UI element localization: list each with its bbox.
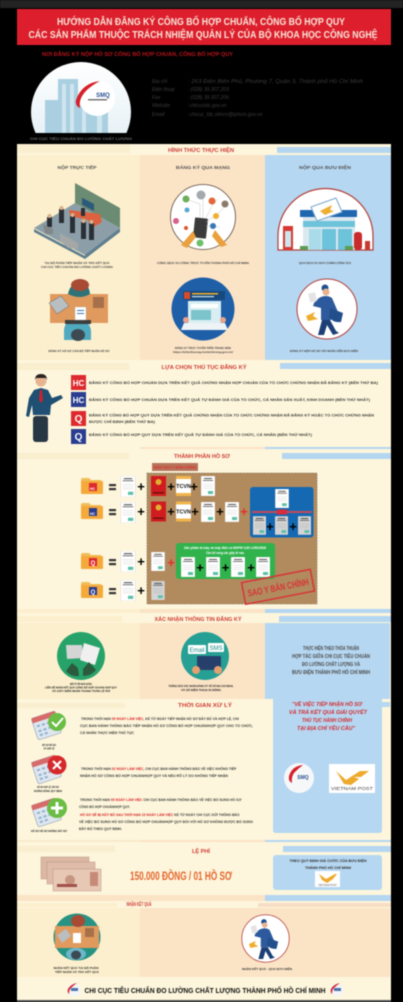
caption xyxy=(54,965,99,974)
icon: email and sms xyxy=(181,632,229,680)
caption: VÀ HỢP LỆ xyxy=(44,746,55,750)
caption: TẠI BỘ PHẬN TIẾP NHẬN VÀ TRẢ KẾT QUẢ xyxy=(44,260,110,265)
title banner xyxy=(17,9,391,45)
logo caption: CHI CỤC TIÊU CHUẨN ĐO LƯỜNG CHẤT LƯỢNG xyxy=(30,136,132,141)
panel backgrounds xyxy=(17,144,391,1002)
option: HC blue xyxy=(71,392,370,407)
text: postal cooperation xyxy=(292,644,370,676)
column headings: NỘP QUA BƯU ĐIỆN xyxy=(299,163,352,170)
icon: receipt paperwork xyxy=(57,632,105,680)
row: HC red: + xyxy=(190,479,198,494)
row: Q red: Q xyxy=(91,561,96,567)
column headings: NỘP TRỰC TIẾP xyxy=(58,163,96,170)
blue box: documents xyxy=(250,487,314,538)
text: supplement: TRONG THỜI HẠN 05 NGÀY LÀM VIỆC CHI CỤC BAN HÀNH THÔNG BÁO VỀ VIỆC BỔ SUNG HỒ SƠ xyxy=(80,797,241,802)
option: Q red: ĐƯỢC CHỈ ĐỊNH (BÊN THỨ BA) xyxy=(89,419,155,424)
callout: postal service panel: "VỀ VIỆC TIẾP NHẬN HỒ SƠ xyxy=(292,700,363,708)
green box: documents: + xyxy=(196,560,204,575)
icon: rejected dossier xyxy=(31,755,67,784)
blue box: documents: + xyxy=(289,519,297,534)
callout: postal fee: VIETNAM POST xyxy=(318,884,337,887)
caption: HỒ SƠ HỢP LỆ, ĐẦY ĐỦ xyxy=(37,784,59,789)
fee amount: 150.000 ĐỒNG / 01 HỒ SƠ xyxy=(130,868,233,883)
text: acceptance xyxy=(80,716,253,735)
row: Q blue xyxy=(81,580,165,601)
icon: receive by post xyxy=(242,915,289,962)
contact details: Email xyxy=(152,112,165,118)
callout: postal service panel: TẠI ĐỊA CHỈ YÊU CẦU" xyxy=(297,724,355,732)
text: postal cooperation: THỰC HIỆN THEO THỎA THUẬN xyxy=(303,644,359,652)
contact details xyxy=(152,78,363,118)
option: Q red: ĐĂNG KÝ CÔNG BỐ HỢP QUY DỰA TRÊN KẾT QUẢ CHỨNG NHẬN CỦA TỔ CHỨC CHỨNG NHẬN ĐÃ ĐĂNG KÝ HOẶC TỔ CHỨC CHỨNG NHẬN xyxy=(89,412,375,418)
green box: documents: Sản phẩm là máy và máy điện có ĐDPW 0,60 LI/50USD8 xyxy=(184,546,266,550)
text: acceptance: TRONG THỜI HẠN 05 NGÀY LÀM VIỆC, KỂ TỪ NGÀY TIẾP NHẬN HỒ SƠ ĐẦY ĐỦ VÀ HỢP LỆ, CHI xyxy=(81,716,239,721)
heading: thành phần hồ sơ: THÀNH PHẦN HỒ SƠ xyxy=(174,453,231,460)
heading: nhận kết quả: NHẬN KẾT QUẢ xyxy=(126,901,152,908)
option: HC blue: ĐĂNG KÝ CÔNG BỐ HỢP CHUẨN DỰA TRÊN KẾT QUẢ TỰ ĐÁNH GIÁ CỦA TỔ CHỨC, CÁ NHÂN SẢN XUẤT, KINH DOANH (BÊN THỨ NHẤT) xyxy=(89,397,370,402)
row: HC blue: + xyxy=(216,504,224,519)
text: supplement: HỒ SƠ SẼ BỊ HỦY BỎ SAU THỜI HẠN 15 NGÀY LÀM VIỆC KỂ TỪ NGÀY CHI CỤC GỬI THÔNG BÁO xyxy=(80,812,240,817)
label: bản sao y bản chính: BẢN SAO Y BẢN CHÍNH xyxy=(154,464,197,470)
option: HC blue: HC xyxy=(73,396,84,405)
title banner: HƯỚNG DẪN ĐĂNG KÝ CÔNG BỐ HỢP CHUẨN, CÔNG BỐ HỢP QUY xyxy=(57,14,345,28)
corkboard xyxy=(147,473,317,604)
caption: TIẾP NHẬN VÀ TRẢ KẾT QUẢ xyxy=(55,969,99,974)
caption: NHẬN KẾT QUẢ - QUA BƯU ĐIỆN xyxy=(242,966,292,971)
caption: THÔNG BÁO XÁC NHẬN ĐĂNG KÝ VỀ SỐ ĐỊA CHỈ EMAIL xyxy=(168,683,234,688)
caption: ĐĂNG KÝ HỒ SƠ CÁN BỘ TIẾP NHẬN HỒ SƠ xyxy=(48,348,110,353)
text: supplement: ĐẦY ĐỦ THEO QUY ĐỊNH. xyxy=(79,826,122,831)
row: HC blue: + xyxy=(191,504,199,519)
row: HC red xyxy=(81,476,215,497)
contact details: Website xyxy=(152,103,170,109)
caption: QUA DỊCH VỤ BƯU CHÍNH CÔNG ÍCH xyxy=(299,260,351,265)
caption: https://chicthuong.tncttchtrung.gov.vn/ xyxy=(173,350,233,354)
row: HC blue: + xyxy=(240,504,248,519)
text: acceptance: CÁ NHÂN THỰC HIỆN THỦ TỤC xyxy=(80,730,135,735)
option: HC red xyxy=(71,375,378,390)
heading: thời gian xử lý: THỜI GIAN XỬ LÝ xyxy=(178,701,233,709)
option: HC red: HC xyxy=(73,379,84,388)
row: HC blue: + xyxy=(167,504,175,519)
icon: receive at counter xyxy=(54,914,100,960)
contact details: Điện thoại xyxy=(152,87,175,93)
heading: lệ phí: LỆ PHÍ xyxy=(192,847,211,855)
illustration: online registration laptop xyxy=(172,278,234,340)
contact details: : (028) 39.307.203 xyxy=(188,87,229,93)
row: Q red xyxy=(81,551,175,572)
stamp: sao y bản chính xyxy=(242,569,314,604)
caption: BIÊN TỜ TIẾP NHẬN HƯỚNG xyxy=(70,681,92,686)
caption: VÀ GIẤY BIÊN NHẬN THANH TOÁN LỆ PHÍ xyxy=(52,688,110,693)
caption: ĐĂNG KÝ TRỰC TUYẾN TRÊN TRANG WEB xyxy=(175,345,231,350)
label: bản sao y bản chính xyxy=(152,463,198,471)
text: rejection: NHẬN HỒ SƠ CÔNG BỐ HỢP CHUẨN/HỢP QUY VÀ NÊU RÕ LÝ DO KHÔNG TIẾP NHẬN xyxy=(80,773,229,778)
row: HC blue xyxy=(81,502,248,523)
contact details: : chicuctdc.gov.vn xyxy=(187,103,227,109)
caption: ĐĂNG KÝ NỘP HỒ SƠ VỚI NHÂN VIÊN BƯU ĐIỆN xyxy=(290,348,358,353)
text: supplement xyxy=(79,797,253,831)
caption: LIÊN HỆ NHẬN KẾT QUẢ CÔNG BỐ HỢP CHUẨN/ HỢP QUY xyxy=(45,684,117,690)
caption: CỔNG DỊCH VỤ CÔNG TRỰC TUYẾN THÀNH PHỐ HỒ CHÍ MINH xyxy=(157,260,249,265)
caption xyxy=(173,345,233,354)
green box: documents: + xyxy=(222,560,230,575)
option: Q blue: Q xyxy=(75,432,83,443)
option: HC red: ĐĂNG KÝ CÔNG BỐ HỢP CHUẨN DỰA TRÊN KẾT QUẢ CHỨNG NHẬN HỢP CHUẨN CỦA TỔ CHỨC CHỨNG NHẬN ĐÃ ĐĂNG KÝ (BÊN THỨ BA) xyxy=(89,380,378,385)
callout: postal fee: THÀNH PHỐ HỒ CHÍ MINH xyxy=(305,865,352,870)
caption xyxy=(168,683,234,692)
blue box: documents: + xyxy=(266,519,274,534)
caption: HỒ SƠ ĐÃ ĐỦ xyxy=(42,742,56,747)
subtitle: NƠI ĐĂNG KÝ NỘP HỒ SƠ CÔNG BỐ HỢP CHUẨN, CÔNG BỐ HỢP QUY xyxy=(42,50,234,58)
row: HC blue: HC xyxy=(90,512,95,516)
callout: postal service panel: VÀ TRẢ KẾT QUẢ GIẢI QUYẾT xyxy=(289,708,368,716)
caption: HỒ SƠ HỒ SƠ KHÔNG ĐẦY ĐỦ xyxy=(31,828,67,833)
text: rejection: TRONG THỜI HẠN 02 NGÀY LÀM VIỆC, CHI CỤC BAN HÀNH THÔNG BÁO VỀ VIỆC KHÔNG TIẾP xyxy=(81,766,237,771)
footer xyxy=(68,983,344,996)
contact details: : chicuc_tdc.skhcn@tphcm.gov.vn xyxy=(187,112,263,118)
option: Q red: Q xyxy=(75,414,83,425)
callout: postal service panel: THỦ TỤC HÀNH CHÍNH xyxy=(302,717,353,724)
row: HC red: + xyxy=(137,479,145,494)
illustration: post office xyxy=(278,189,373,250)
contact details: : 263 Điện Biên Phủ, Phường 7, Quận 3, Thành phố Hồ Chí Minh xyxy=(188,78,363,85)
row: Q blue: + xyxy=(137,583,145,598)
green box: documents: + xyxy=(247,560,255,575)
row: HC red: HC xyxy=(90,487,95,491)
column headings xyxy=(58,163,352,170)
icon: accepted dossier xyxy=(31,711,66,740)
icon: banknotes xyxy=(41,857,101,891)
column headings: ĐĂNG KÝ QUA MẠNG xyxy=(176,164,230,170)
text: supplement: CÔNG BỐ HỢP CHUẨN/HỢP QUY. xyxy=(79,804,130,809)
figure: man in suit xyxy=(26,374,63,442)
stamp: sao y bản chính: SAO Y BẢN CHÍNH xyxy=(247,576,310,600)
heading: hình thức thực hiện: HÌNH THỨC THỰC HIỆN xyxy=(168,146,234,154)
text: postal cooperation: HỢP TÁC GIỮA CHI CỤC TIÊU CHUẨN xyxy=(292,652,370,660)
contact details: : (028) 39.307.206 xyxy=(188,95,229,101)
caption: CHI CỤC TIÊU CHUẨN ĐO LƯỜNG CHẤT LƯỢNG xyxy=(41,264,113,269)
text: rejection xyxy=(80,766,237,778)
row: Q blue: Q xyxy=(91,590,96,596)
footer: CHI CỤC TIÊU CHUẨN ĐO LƯỜNG CHẤT LƯỢNG THÀNH PHỐ HỒ CHÍ MINH xyxy=(84,985,326,995)
logo: Vietnam Post: VIETNAM POST xyxy=(331,786,373,791)
row: HC red: + xyxy=(167,479,175,494)
caption xyxy=(42,742,56,750)
caption xyxy=(34,784,62,793)
callout: postal service panel xyxy=(265,698,382,833)
row: HC blue: + xyxy=(137,504,145,519)
callout: postal fee: THEO QUY ĐỊNH GIÁ CƯỚC CỦA BƯU ĐIỆN xyxy=(290,858,367,863)
caption: VÀ SỐ ĐIỆN THOẠI DI ĐỘNG xyxy=(181,687,221,692)
illustration: desk meeting xyxy=(49,279,108,341)
caption xyxy=(41,260,113,269)
text: supplement: VỀ VIỆC BỔ SUNG HỒ SƠ CÔNG BỐ HỢP CHUẨN/HỢP QUY ĐỐI VỚI HỒ SƠ KHÔNG ĐƯỢC BỔ SUNG xyxy=(79,819,253,824)
callout: postal fee xyxy=(273,855,382,890)
option: Q blue: ĐĂNG KÝ CÔNG BỐ HỢP QUY DỰA TRÊN KẾT QUẢ TỰ ĐÁNH GIÁ CỦA TỔ CHỨC, CÁ NHÂN (BÊN THỨ NHẤT) xyxy=(89,432,312,437)
row: Q red: + xyxy=(137,554,145,569)
green box: documents xyxy=(176,543,275,579)
option: Q blue xyxy=(71,429,312,444)
green box: documents: Cần bổ sung các giấy tờ sau xyxy=(206,551,244,555)
logo: SMQ: SMQ xyxy=(297,775,309,781)
icon: email and sms: Email xyxy=(189,648,205,654)
illustration: online network circle xyxy=(170,184,236,250)
option: Q red xyxy=(71,411,375,426)
text: postal cooperation: ĐO LƯỜNG CHẤT LƯỢNG VÀ xyxy=(302,660,360,668)
logo: SMQ dome xyxy=(30,61,132,141)
caption xyxy=(45,681,117,693)
heading: xác nhận thông tin đăng ký: XÁC NHẬN THÔNG TIN ĐĂNG KÝ xyxy=(154,615,242,623)
text: acceptance: CỤC BAN HÀNH THÔNG BÁO TIẾP NHẬN HỒ SƠ CÔNG BỐ HỢP CHUẨN/HỢP QUY CHO TỔ CHỨC, xyxy=(80,723,253,728)
row: Q red: + xyxy=(167,555,175,570)
caption: NHẬN KẾT QUẢ TẠI BỘ PHẬN xyxy=(54,965,99,970)
text: postal cooperation: BƯU ĐIỆN THÀNH PHỐ HỒ CHÍ MINH xyxy=(292,668,370,676)
caption: KHÔNG ĐÚNG QUY ĐỊNH xyxy=(34,788,62,793)
icon: supplement dossier xyxy=(31,798,67,827)
illustration: postman xyxy=(297,279,357,339)
contact details: Địa chỉ xyxy=(152,78,168,85)
logo: SMQ dome: SMQ xyxy=(96,93,110,99)
icon: email and sms: SMS xyxy=(209,646,223,652)
heading: lựa chọn thủ tục đăng ký: LỰA CHỌN THỦ TỤC ĐĂNG KÝ xyxy=(162,364,247,371)
contact details: Fax xyxy=(152,95,161,101)
illustration: reception office xyxy=(34,183,120,259)
